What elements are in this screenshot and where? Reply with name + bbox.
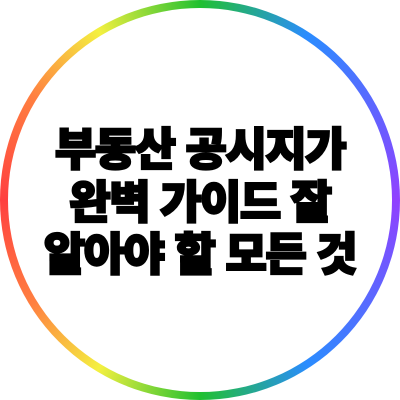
- title: 부동산 공시지가: [55, 124, 345, 175]
- title: 알아야 할 모든 것: [44, 229, 356, 280]
- title: 완벽 가이드 잘: [69, 176, 331, 228]
- title: [44, 124, 357, 280]
